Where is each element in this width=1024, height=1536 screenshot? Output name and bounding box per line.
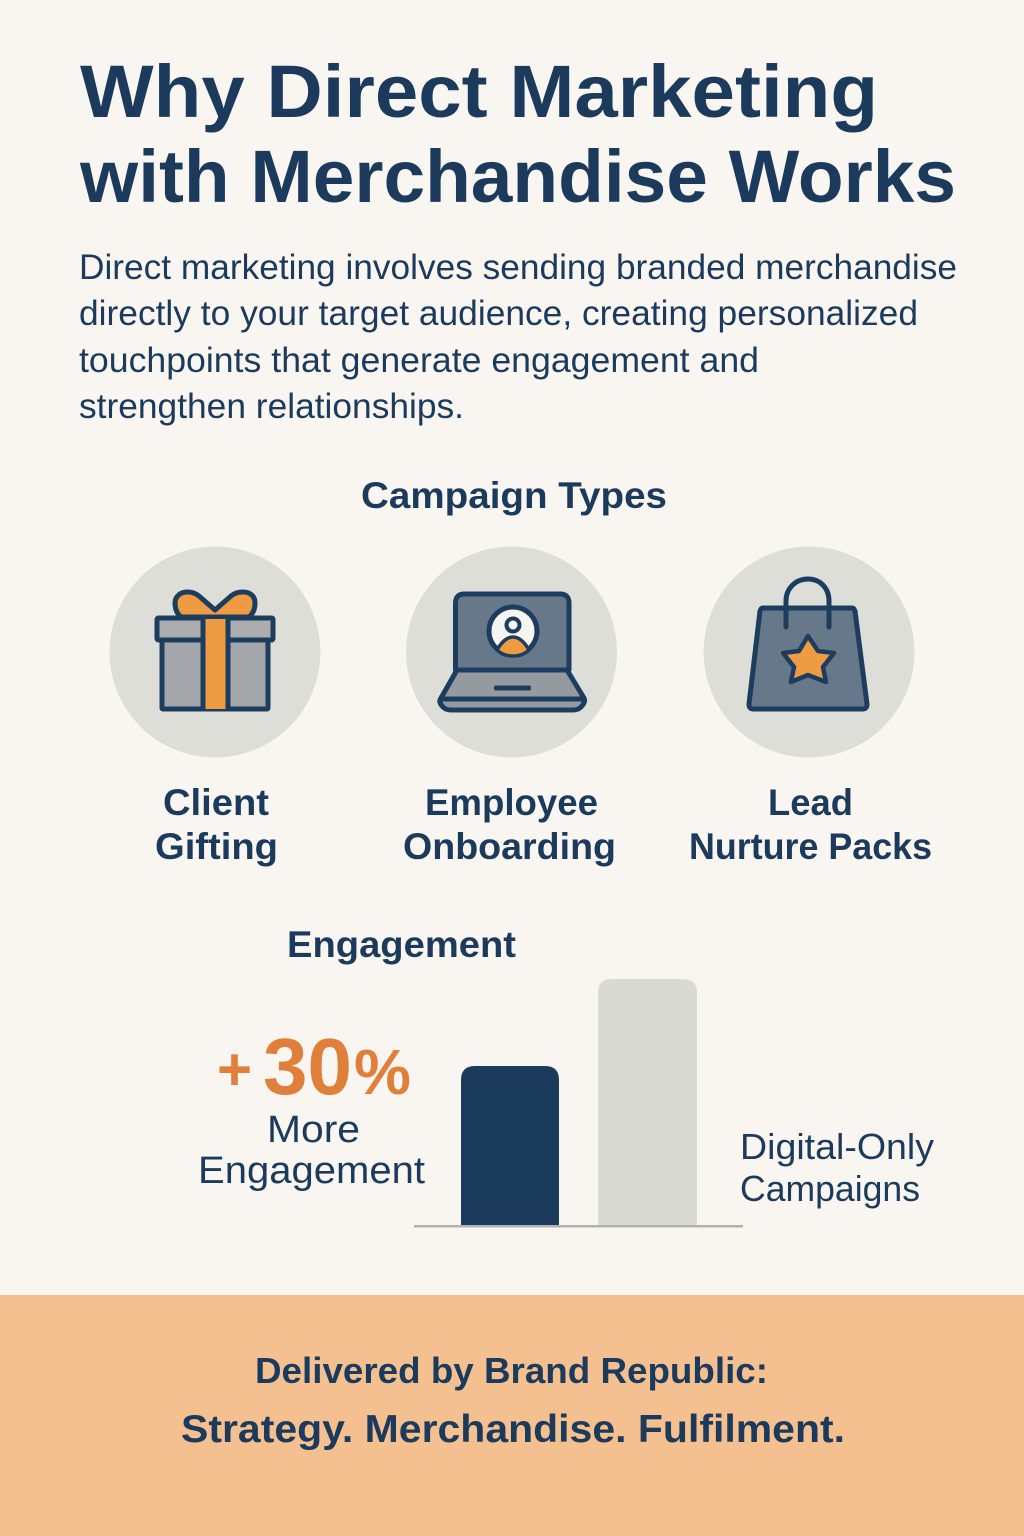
campaign: client gifting (110, 546, 320, 867)
stat caption: More (267, 1109, 360, 1151)
stat caption: Engagement (198, 1150, 425, 1192)
icon: laptop with profile (406, 546, 617, 758)
label: employee onboarding (403, 782, 616, 867)
intro paragraph (79, 248, 957, 426)
campaign: lead nurture packs (689, 546, 932, 867)
stat caption (198, 1109, 425, 1192)
heading: campaign types: Campaign Types (361, 475, 667, 516)
label: digital-only campaigns: Campaigns (740, 1168, 920, 1209)
label: employee onboarding: Onboarding (403, 826, 616, 867)
label: digital-only campaigns: Digital-Only (740, 1126, 934, 1167)
intro paragraph: touchpoints that generate engagement and (79, 341, 759, 380)
footer banner: Delivered by Brand Republic: (255, 1350, 768, 1391)
footer banner (0, 1295, 1024, 1536)
stat: 30 percent more engagement (198, 1022, 425, 1192)
label: client gifting: Client (163, 782, 269, 823)
label: employee onboarding: Employee (425, 782, 598, 823)
label: lead nurture packs (689, 782, 932, 867)
label: digital-only campaigns (740, 1126, 934, 1209)
bar chart (414, 979, 743, 1228)
title: with Merchandise Works (79, 135, 956, 218)
icon: shopping bag with star (704, 546, 914, 758)
stat value: 30 (263, 1022, 352, 1111)
stat value: % (354, 1036, 411, 1108)
footer banner: Strategy. Merchandise. Fulfilment. (181, 1408, 845, 1451)
label: client gifting: Gifting (155, 826, 278, 867)
campaign: employee onboarding (403, 546, 617, 867)
title (79, 50, 956, 218)
icon: gift box (110, 546, 320, 758)
title: Why Direct Marketing (80, 50, 878, 133)
label: lead nurture packs: Nurture Packs (689, 826, 932, 867)
label: lead nurture packs: Lead (768, 782, 853, 823)
intro paragraph: Direct marketing involves sending branded merchandise (79, 248, 957, 287)
intro paragraph: directly to your target audience, creating personalized (79, 294, 918, 333)
intro paragraph: strengthen relationships. (79, 387, 464, 426)
heading: engagement: Engagement (287, 924, 516, 965)
label: client gifting (155, 782, 278, 867)
stat value: + (217, 1036, 252, 1103)
